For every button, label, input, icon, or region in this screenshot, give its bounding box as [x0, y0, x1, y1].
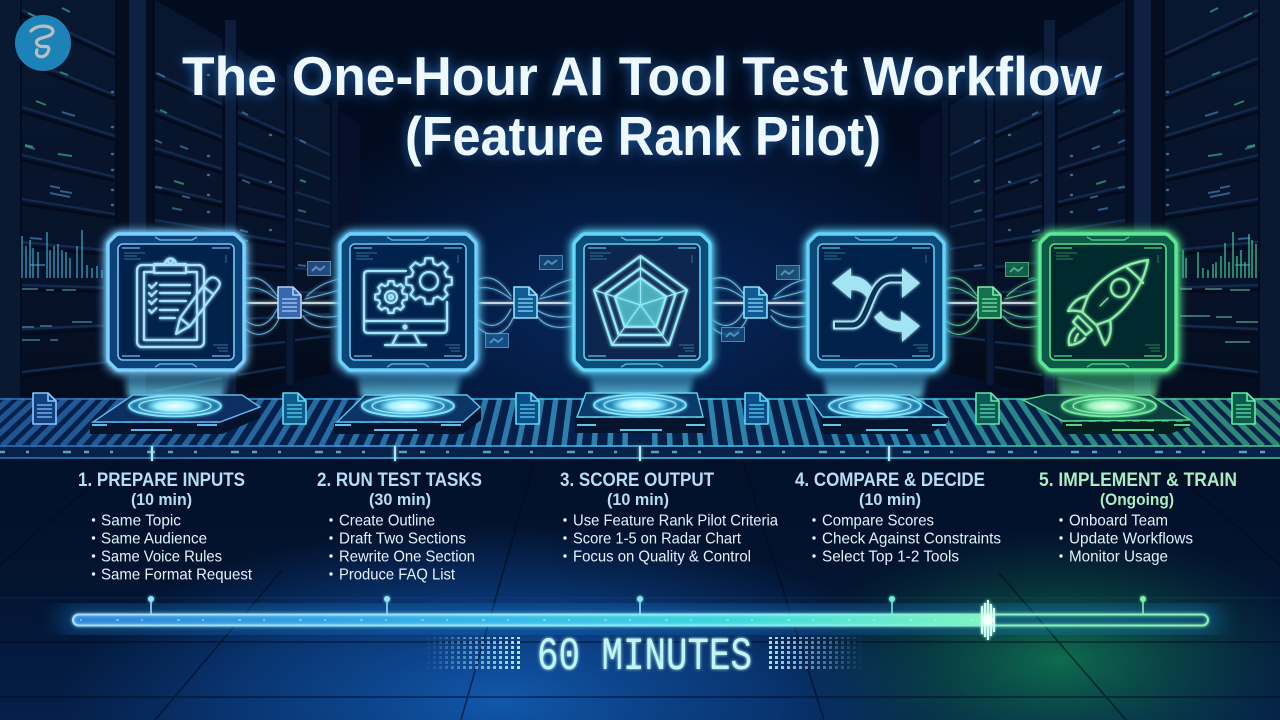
connectors between panels — [245, 278, 1039, 334]
step 4 text — [795, 470, 1001, 566]
60 minutes label: 60 MINUTES — [537, 631, 752, 683]
step 5 text — [1039, 470, 1237, 566]
step 5 text: (Ongoing) — [1100, 490, 1174, 509]
step 2 text: (30 min) — [369, 490, 431, 509]
step 4 text: Check Against Constraints — [822, 530, 1001, 548]
step 1 text: 1. PREPARE INPUTS — [78, 470, 245, 491]
step 3 hologram: radar chart — [574, 234, 710, 433]
step 5 text: 5. IMPLEMENT & TRAIN — [1039, 470, 1237, 491]
step 2 hologram: monitor and gears — [334, 234, 481, 434]
step 2 text: Create Outline — [339, 512, 435, 530]
step 5 text: Onboard Team — [1069, 512, 1168, 530]
step 4 text: 4. COMPARE & DECIDE — [795, 470, 985, 491]
step 1 text: (10 min) — [131, 490, 192, 509]
step 3 text: Score 1-5 on Radar Chart — [573, 530, 742, 548]
floor — [0, 458, 1280, 720]
step 1 text: Same Format Request — [101, 566, 253, 584]
step 1 text: Same Audience — [101, 530, 207, 548]
step 5 text: Monitor Usage — [1069, 548, 1168, 566]
belt documents — [33, 393, 1255, 424]
step 3 text: (10 min) — [607, 490, 669, 509]
step 2 text — [317, 470, 482, 584]
logo badge — [15, 15, 71, 71]
step 2 text: 2. RUN TEST TASKS — [317, 470, 482, 491]
title: The One-Hour AI Tool Test Workflow — [182, 45, 1102, 107]
step 5 text: Update Workflows — [1069, 530, 1193, 548]
step 2 text: Rewrite One Section — [339, 548, 475, 566]
title: (Feature Rank Pilot) — [405, 105, 881, 167]
dot matrix: left — [424, 637, 520, 670]
step 4 hologram: shuffle arrows — [807, 234, 948, 434]
step 1 text: Same Voice Rules — [101, 548, 222, 566]
step 4 text: (10 min) — [859, 490, 921, 509]
side chart: right — [1180, 232, 1258, 342]
step 3 text: Focus on Quality & Control — [573, 548, 751, 566]
step 1 hologram: clipboard — [90, 234, 260, 434]
flow documents and mini cards — [278, 256, 1028, 348]
step 3 text: 3. SCORE OUTPUT — [560, 470, 714, 491]
side chart: left — [22, 230, 107, 340]
step 3 text — [560, 470, 778, 566]
dot matrix: right — [766, 637, 864, 670]
step 4 text: Select Top 1-2 Tools — [822, 548, 959, 566]
step 1 text — [78, 470, 253, 584]
step 3 text: Use Feature Rank Pilot Criteria — [573, 512, 778, 530]
title — [182, 45, 1102, 167]
step 2 text: Produce FAQ List — [339, 566, 456, 584]
step 4 text: Compare Scores — [822, 512, 934, 530]
step 1 text: Same Topic — [101, 512, 181, 530]
conveyor belt — [0, 398, 1280, 461]
timeline bar — [60, 596, 1220, 640]
step 5 hologram: rocket — [1023, 234, 1190, 434]
step 2 text: Draft Two Sections — [339, 530, 466, 548]
